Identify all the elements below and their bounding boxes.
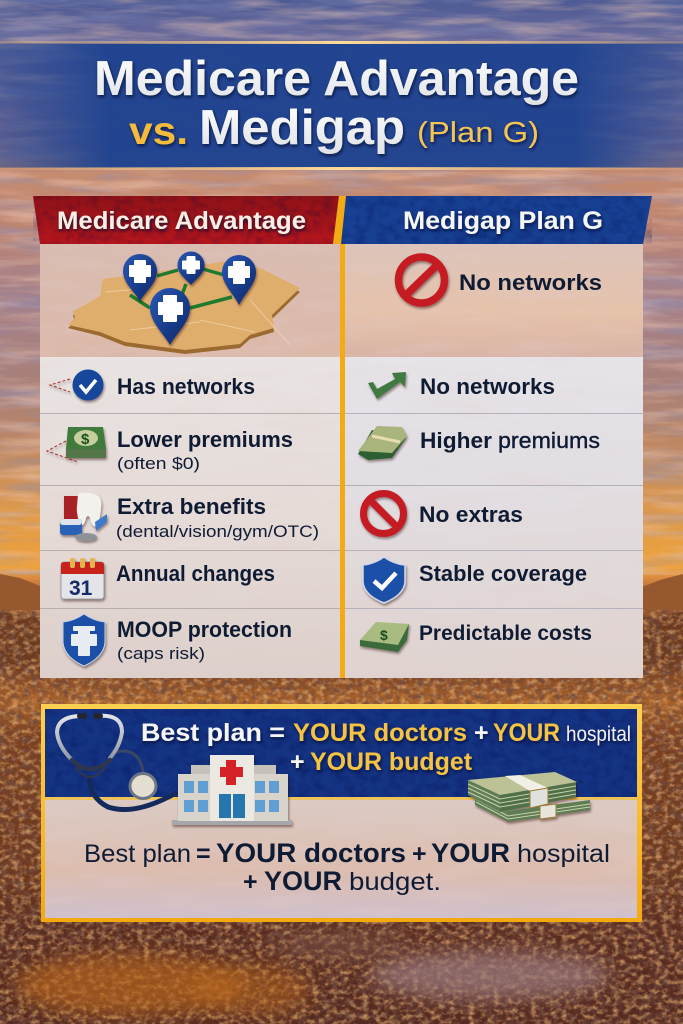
callout: lower strip: YOUR doctors	[216, 838, 406, 868]
row: extra benefits	[60, 492, 319, 541]
callout: blue upper strip: YOUR budget	[310, 748, 473, 776]
icon: tooth with dental and vision items	[60, 492, 107, 541]
callout: blue upper strip: Best plan =	[141, 719, 285, 747]
icon: cash	[360, 622, 409, 652]
panel: medigap plan g column	[338, 196, 652, 678]
icon: dollar bills: $	[81, 431, 90, 448]
row: no extras	[364, 494, 523, 534]
callout: blue upper strip	[45, 709, 637, 797]
callout: blue upper strip: +	[290, 748, 305, 776]
icon: shield with check	[363, 557, 405, 603]
callout: lower strip: =	[196, 840, 211, 868]
gold column divider	[333, 196, 346, 678]
icon: dollar bills	[47, 427, 106, 462]
heading: medigap plan g: Medigap Plan G	[403, 207, 603, 235]
pin	[222, 255, 256, 305]
icon: calendar 31	[61, 558, 104, 600]
row: lower premiums: Lower premiums	[117, 427, 293, 452]
pin	[123, 254, 157, 301]
title line 2	[129, 101, 539, 155]
callout: blue upper strip: YOUR doctors	[293, 719, 467, 747]
callout: blue upper strip: hospital	[566, 723, 631, 746]
row: has networks: Has networks	[117, 374, 255, 399]
title band	[0, 41, 683, 170]
heading: medigap plan g	[338, 196, 652, 244]
callout: lower strip: hospital	[517, 840, 610, 868]
title line 2: Medigap	[199, 101, 405, 155]
row: higher premiums: Higher	[420, 428, 492, 453]
icon: shield with cross	[63, 614, 105, 666]
row: has networks	[50, 370, 255, 400]
row: no networks: No networks	[420, 374, 555, 399]
row: predictable costs	[360, 622, 592, 652]
title line 2: vs.	[129, 110, 188, 153]
row: moop protection	[63, 614, 292, 666]
row: lower premiums: (often $0)	[117, 454, 200, 473]
callout: lower strip: YOUR	[431, 838, 510, 868]
row: no networks	[368, 372, 555, 399]
row: moop protection: MOOP protection	[117, 617, 292, 642]
row: extra benefits: Extra benefits	[117, 494, 266, 519]
title line 2: (Plan G)	[417, 117, 539, 149]
callout: lower strip: +	[243, 868, 258, 896]
panel: best plan callout	[41, 704, 642, 922]
pin	[178, 252, 204, 285]
title line 1: Medicare Advantage	[94, 52, 579, 106]
pin	[150, 288, 190, 345]
row: higher premiums: premiums	[498, 428, 600, 453]
icon: stethoscope	[57, 716, 176, 810]
row: stable coverage: Stable coverage	[419, 561, 587, 586]
callout: lower strip: +	[412, 840, 427, 868]
row: stable coverage	[363, 557, 587, 603]
row: annual changes: Annual changes	[116, 561, 275, 586]
row: annual changes	[61, 558, 275, 600]
row: no extras: No extras	[419, 502, 523, 527]
callout: blue upper strip: YOUR	[493, 719, 560, 747]
icon: cash stack	[358, 426, 407, 460]
panel: comparison table	[33, 196, 652, 678]
callout: lower strip	[45, 800, 637, 918]
text: no networks: No networks	[459, 270, 602, 295]
row: moop protection: (caps risk)	[117, 644, 205, 663]
icon: prohibited sign	[364, 494, 404, 534]
callout: lower strip: budget.	[349, 868, 441, 896]
illustration: map with provider network pins	[68, 252, 300, 354]
row: extra benefits: (dental/vision/gym/OTC)	[116, 522, 319, 541]
callout: lower strip: YOUR	[264, 866, 342, 896]
icon: green check arrow	[368, 372, 406, 399]
panel: medicare advantage column	[33, 196, 340, 678]
callout: blue upper strip: +	[474, 719, 489, 747]
icon: check badge	[50, 370, 104, 400]
row: predictable costs: Predictable costs	[419, 622, 592, 645]
row: lower premiums	[47, 427, 293, 473]
icon: calendar 31: 31	[69, 577, 93, 600]
icon: hospital building	[172, 755, 292, 825]
icon: cash: $	[380, 627, 388, 643]
heading: medicare advantage	[33, 196, 339, 244]
heading: medicare advantage: Medicare Advantage	[57, 207, 306, 235]
callout: lower strip: Best plan	[84, 840, 191, 868]
icon: stacks of cash	[468, 772, 590, 822]
row: higher premiums	[358, 426, 600, 460]
icon: prohibited sign	[398, 257, 444, 303]
